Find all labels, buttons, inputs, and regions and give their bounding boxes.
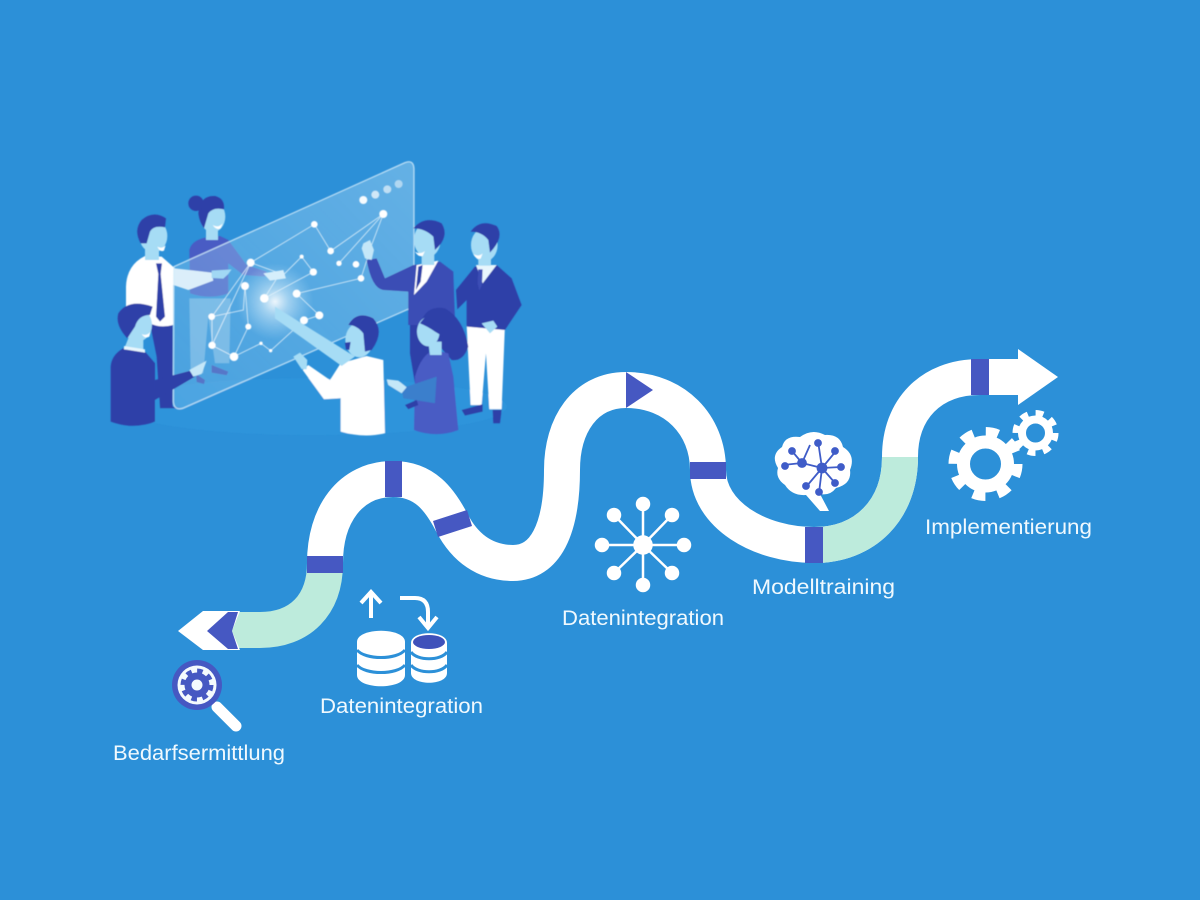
person: man in white shirt xyxy=(126,215,232,408)
arrow head right xyxy=(1018,349,1058,405)
person: man with navy cardigan xyxy=(456,223,522,423)
icon: brain xyxy=(775,432,852,511)
person: seated man front left xyxy=(111,304,207,426)
network nodes xyxy=(208,210,387,361)
label: Implementierung: Implementierung xyxy=(925,516,1092,539)
network lines xyxy=(212,214,383,357)
icon: magnifier with gear xyxy=(172,660,236,726)
label: Datenintegration (databases): Datenintegration xyxy=(320,695,483,718)
person: woman front right xyxy=(387,308,468,434)
road markers xyxy=(207,359,989,649)
arrow head left xyxy=(178,611,240,650)
person: woman behind screen xyxy=(188,196,267,384)
glass screen xyxy=(173,162,414,409)
road: white path xyxy=(325,377,1020,563)
label: Modelltraining: Modelltraining xyxy=(752,576,895,599)
icon: databases with arrows xyxy=(357,592,447,686)
hand on screen xyxy=(263,270,286,281)
road: green segment end xyxy=(814,457,900,545)
person: man with suit raising hand xyxy=(362,220,455,383)
label: Datenintegration (network): Datenintegration xyxy=(562,607,724,630)
screen glow xyxy=(237,263,313,340)
process road xyxy=(232,377,1020,630)
icon: network hub xyxy=(596,498,690,591)
icon: gears xyxy=(954,413,1056,496)
illustration: team at data screen xyxy=(111,162,522,435)
person: man pointing at screen xyxy=(275,307,385,435)
screen dots xyxy=(359,180,403,204)
label: Bedarfsermittlung: Bedarfsermittlung xyxy=(113,742,285,765)
floor shadow xyxy=(120,378,507,435)
road: green segment start xyxy=(232,563,325,630)
